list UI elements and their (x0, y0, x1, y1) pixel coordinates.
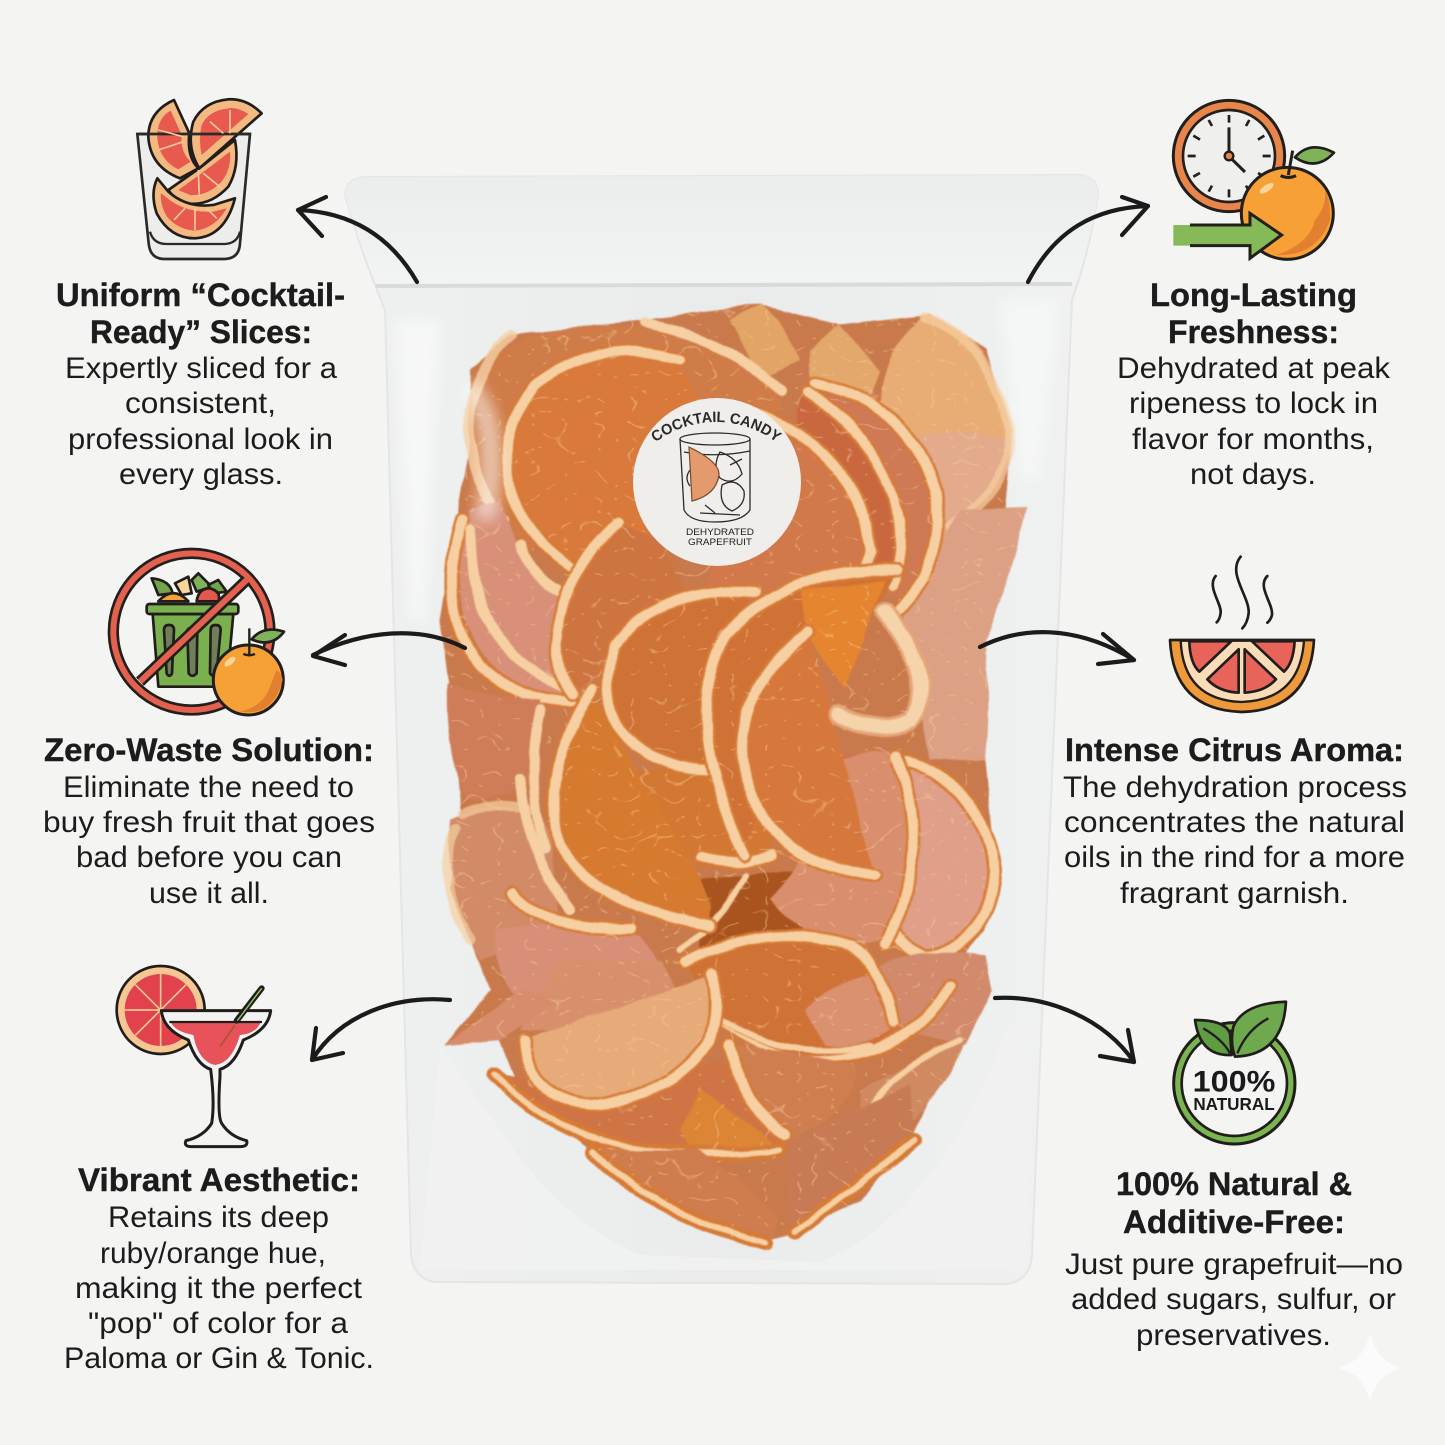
body: Expertly sliced for a (65, 352, 337, 385)
heading (56, 277, 345, 350)
heading: Freshness: (1168, 314, 1339, 350)
body: not days. (1190, 458, 1316, 491)
sticker product name (686, 527, 754, 548)
arrow: to natural (995, 998, 1134, 1062)
body: buy fresh fruit that goes (43, 806, 375, 839)
body: ripeness to lock in (1129, 387, 1378, 420)
icon: no food waste (113, 553, 284, 715)
icon: clock, orange and arrow (1173, 100, 1334, 259)
slice pile base (440, 305, 1025, 1245)
text block: long-lasting freshness (1117, 277, 1391, 491)
sticker: cocktail candy (633, 398, 801, 566)
arrow: to freshness (1028, 197, 1148, 282)
sticker brand name: COCKTAIL CANDY (652, 412, 782, 440)
arrow: to aesthetic (312, 999, 450, 1060)
sticker citrus slice (689, 447, 719, 501)
panel: product bag (344, 174, 1099, 1285)
badge text: NATURAL (1193, 1094, 1275, 1114)
body: oils in the rind for a more (1064, 841, 1405, 874)
body: Retains its deep (108, 1201, 329, 1234)
badge text: 100% (1193, 1066, 1275, 1099)
body: Paloma or Gin & Tonic. (64, 1342, 374, 1375)
heading: Uniform “Cocktail- (56, 277, 345, 313)
sparkle watermark (1338, 1332, 1402, 1402)
icon: 100% natural badge (1174, 1002, 1295, 1144)
body: professional look in (68, 423, 333, 456)
body: Eliminate the need to (63, 771, 354, 804)
heading (1116, 1166, 1352, 1240)
heading: Additive-Free: (1123, 1204, 1345, 1240)
sticker product name: GRAPEFRUIT (688, 537, 752, 548)
text block: citrus aroma (1063, 732, 1407, 910)
body (1065, 1248, 1403, 1352)
body: added sugars, sulfur, or (1071, 1283, 1396, 1316)
body: bad before you can (76, 841, 342, 874)
text block: vibrant aesthetic (64, 1162, 374, 1375)
body: The dehydration process (1063, 771, 1407, 804)
arrow: to zero waste (313, 633, 465, 665)
text block: uniform slices (56, 277, 345, 491)
body: concentrates the natural (1064, 806, 1405, 839)
body (1117, 352, 1391, 491)
arrow: to aroma (980, 632, 1134, 664)
bag gusset (420, 1020, 1030, 1270)
body (1063, 771, 1407, 910)
heading: 100% Natural & (1116, 1166, 1352, 1202)
bag film (345, 175, 1098, 1284)
icon: steaming citrus wedge (1170, 557, 1314, 712)
body: Just pure grapefruit—no (1065, 1248, 1403, 1281)
bag top seal (345, 175, 1098, 284)
body (65, 352, 337, 491)
body: preservatives. (1136, 1319, 1331, 1352)
body: fragrant garnish. (1120, 877, 1349, 910)
body: making it the perfect (75, 1272, 363, 1305)
text block: natural and additive-free (1065, 1166, 1403, 1352)
heading: Zero-Waste Solution: (44, 732, 374, 768)
heading: Vibrant Aesthetic: (78, 1162, 360, 1198)
body (43, 771, 375, 910)
body (64, 1201, 374, 1375)
body: "pop" of color for a (88, 1307, 348, 1340)
icon: grapefruit slices in glass (137, 99, 262, 259)
sticker product name: DEHYDRATED (686, 527, 754, 538)
heading: Long-Lasting (1150, 277, 1357, 313)
heading: Ready” Slices: (90, 314, 312, 350)
zipper line (376, 284, 1072, 286)
badge text (1193, 1066, 1275, 1114)
body: flavor for months, (1132, 423, 1374, 456)
heading (1150, 277, 1357, 350)
body: consistent, (125, 387, 276, 420)
bag highlights (395, 300, 1060, 620)
body: every glass. (119, 458, 283, 491)
body: ruby/orange hue, (100, 1237, 326, 1270)
grapefruit slices (440, 305, 1027, 1245)
sticker glass drawing (680, 433, 750, 522)
heading: Intense Citrus Aroma: (1065, 732, 1404, 768)
arrow: to slices (298, 197, 417, 282)
text block: zero waste (43, 732, 375, 910)
body: use it all. (149, 877, 269, 910)
icon: cocktail with citrus (117, 966, 271, 1147)
body: Dehydrated at peak (1117, 352, 1391, 385)
